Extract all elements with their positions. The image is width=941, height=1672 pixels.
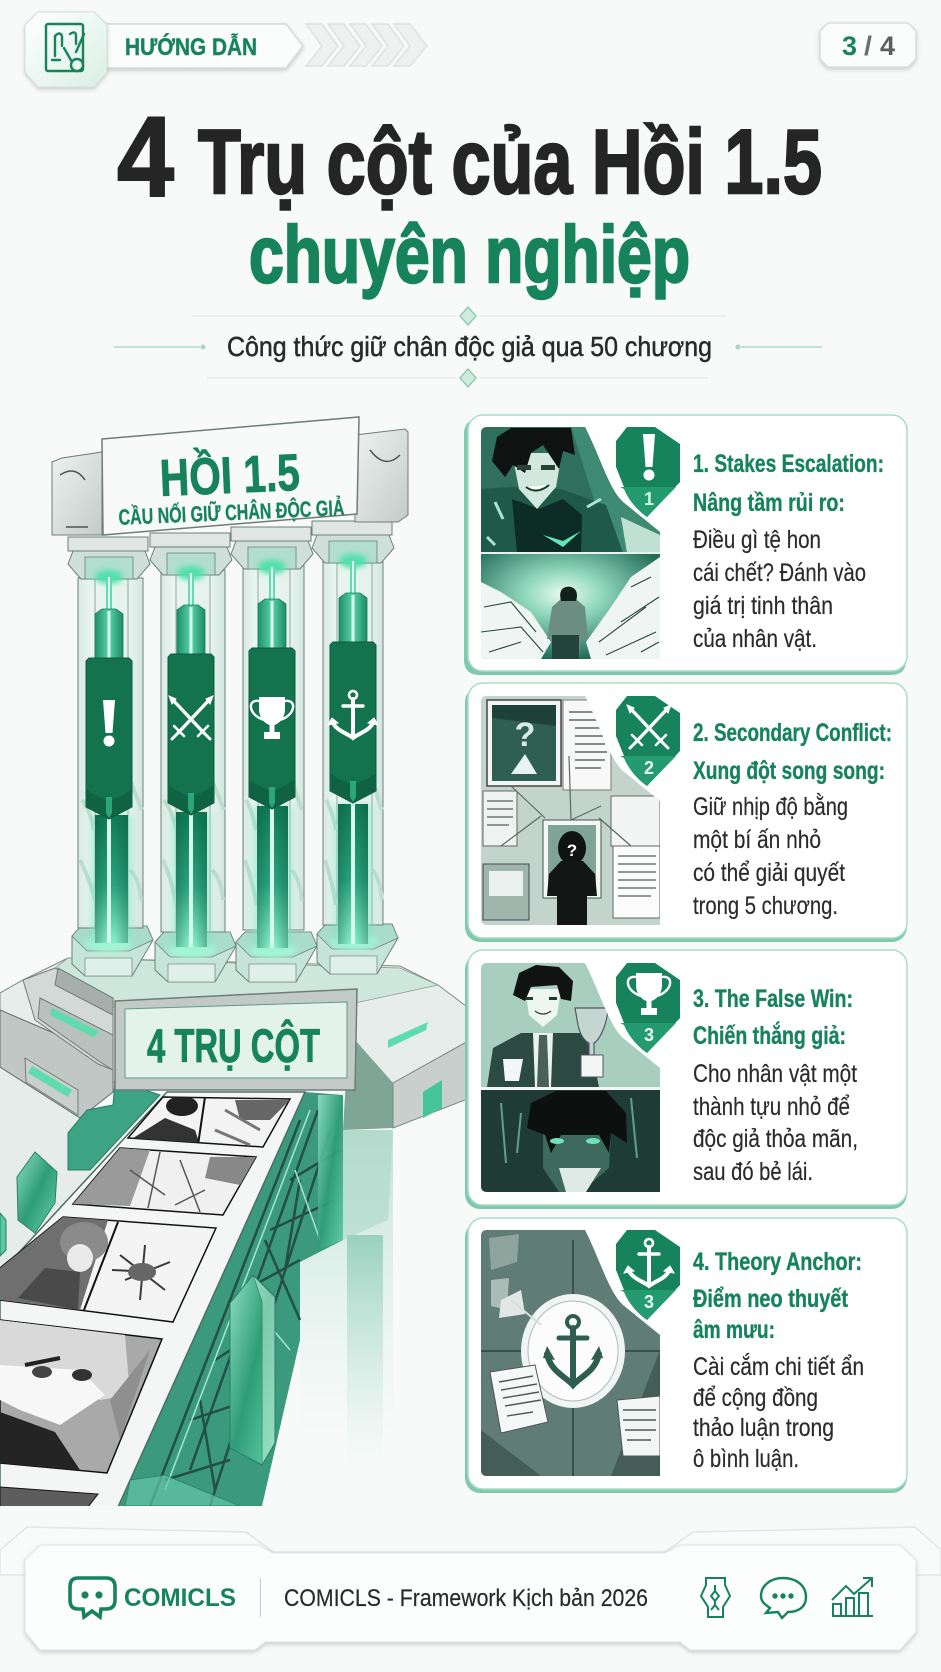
- icon: exclamation: [103, 700, 115, 746]
- card 2 picture: ?: [567, 841, 577, 860]
- card 4 text: thảo luận trong: [693, 1414, 834, 1442]
- card 3 text: sau đó bẻ lái.: [693, 1158, 813, 1186]
- pillar 1: exclamation: [68, 537, 153, 976]
- icon: growth chart: [832, 1578, 873, 1616]
- card 2 text: Giữ nhịp độ bằng: [693, 792, 848, 821]
- platform: [0, 958, 465, 1267]
- card 1 text: 1. Stakes Escalation:: [693, 450, 884, 478]
- card 2 text: trong 5 chương.: [693, 892, 838, 920]
- card 4: Theory Anchor: [465, 1218, 907, 1493]
- footer text: COMICLS - Framework Kịch bản 2026: [284, 1585, 648, 1612]
- bridge lattice: [118, 1092, 343, 1506]
- manga panel A: [128, 1096, 290, 1147]
- card 3 text: Chiến thắng giả:: [693, 1020, 846, 1050]
- card 3 text: 3. The False Win:: [693, 985, 853, 1013]
- pillar 4: anchor: [312, 521, 398, 974]
- badge 3: [616, 963, 680, 1053]
- card 4 text: [693, 1248, 864, 1473]
- manga film strip: [0, 1092, 305, 1507]
- card 2 text: Xung đột song song:: [693, 757, 885, 785]
- card 1 text: cái chết? Đánh vào: [693, 559, 866, 587]
- card 4 text: ô bình luận.: [693, 1445, 799, 1473]
- card 3 text: [693, 985, 858, 1186]
- icon: trophy: [251, 697, 293, 739]
- reflection below platform: [300, 1130, 393, 1436]
- icon: chat bubble: [761, 1578, 806, 1618]
- title: chuyên nghiệp: [249, 210, 690, 299]
- sign: Hồi 1.5: CẦU NỐI GIỮ CHÂN ĐỘC GIẢ: [118, 494, 345, 530]
- card 2: Secondary Conflict: [465, 683, 907, 942]
- crystals: [0, 1073, 275, 1506]
- logo: COMICLS: COMICLS: [124, 1584, 236, 1612]
- card 3 text: thành tựu nhỏ để: [693, 1093, 850, 1121]
- title: [117, 94, 822, 299]
- card 2 text: có thể giải quyết: [693, 859, 845, 887]
- card 4 text: để cộng đồng: [693, 1384, 818, 1412]
- card 4 text: âm mưu:: [693, 1316, 775, 1344]
- header bar: [25, 12, 916, 87]
- badge 2: 2: [644, 758, 654, 778]
- ribbon: guide label: HƯỚNG DẪN: [125, 32, 257, 61]
- card 1 text: của nhân vật.: [693, 625, 817, 653]
- badge 4: [616, 1230, 680, 1320]
- card 4 text: Cài cắm chi tiết ẩn: [693, 1352, 864, 1381]
- card 3 text: độc giả thỏa mãn,: [693, 1125, 858, 1153]
- card 1 text: Điều gì tệ hon: [693, 526, 821, 554]
- badge 1: [616, 427, 680, 517]
- card 3: The False Win: [465, 950, 907, 1209]
- icon: anchor: [328, 691, 378, 738]
- subtitle with ornaments: [114, 307, 822, 387]
- sign: 4 trụ cột: 4 TRỤ CỘT: [147, 1019, 320, 1072]
- sign: Hồi 1.5: [102, 417, 359, 535]
- sign: 4 trụ cột: [115, 989, 357, 1090]
- page number badge: 4: [880, 31, 895, 61]
- logo: COMICLS: [70, 1578, 236, 1617]
- icon: swords: [169, 696, 213, 739]
- page number badge: [820, 23, 916, 67]
- badge 1: 1: [644, 489, 654, 509]
- card 1 text: Nâng tầm rủi ro:: [693, 489, 845, 517]
- page number badge: 3: [842, 31, 857, 61]
- card 1 picture: [481, 427, 660, 659]
- sign: Hồi 1.5: HỒI 1.5: [159, 443, 301, 508]
- page number badge: /: [864, 31, 873, 61]
- card 2 picture: [481, 696, 660, 925]
- card 1 text: [693, 450, 884, 653]
- icon: script document tile: [25, 12, 107, 87]
- card 2 text: [693, 719, 892, 920]
- entablature stone: [52, 429, 408, 535]
- card 4 text: Điểm neo thuyết: [693, 1285, 849, 1313]
- illustration: pillars on platform with manga film bridge: [0, 417, 470, 1507]
- badge 2: [616, 696, 680, 786]
- manga panel E: [0, 1487, 98, 1507]
- ribbon: guide label: [100, 24, 303, 68]
- footer bar: [0, 1527, 941, 1650]
- icon: pen nib: [701, 1578, 730, 1617]
- card 3 picture: [481, 963, 660, 1192]
- chevron decoration: [306, 24, 427, 66]
- card 1 text: giá trị tinh thân: [693, 592, 833, 620]
- manga panel D: [0, 1320, 162, 1473]
- card 1: Stakes Escalation: [464, 415, 907, 675]
- pillar 3: trophy: [231, 527, 317, 982]
- card 3 text: Cho nhân vật một: [693, 1060, 857, 1088]
- title: 4: [117, 94, 174, 221]
- card 2 text: một bí ấn nhỏ: [693, 826, 821, 854]
- subtitle with ornaments: Công thức giữ chân độc giả qua 50 chương: [227, 331, 712, 362]
- pillar 2: crossed swords: [150, 533, 236, 982]
- card 4 picture: [481, 1230, 660, 1476]
- badge 3: 3: [644, 1025, 654, 1045]
- card 2 picture: ?: [515, 716, 535, 754]
- manga panel B: [73, 1148, 256, 1215]
- manga panel C: [0, 1217, 216, 1322]
- badge 4: 3: [644, 1292, 654, 1312]
- card 4 text: 4. Theory Anchor:: [693, 1248, 862, 1276]
